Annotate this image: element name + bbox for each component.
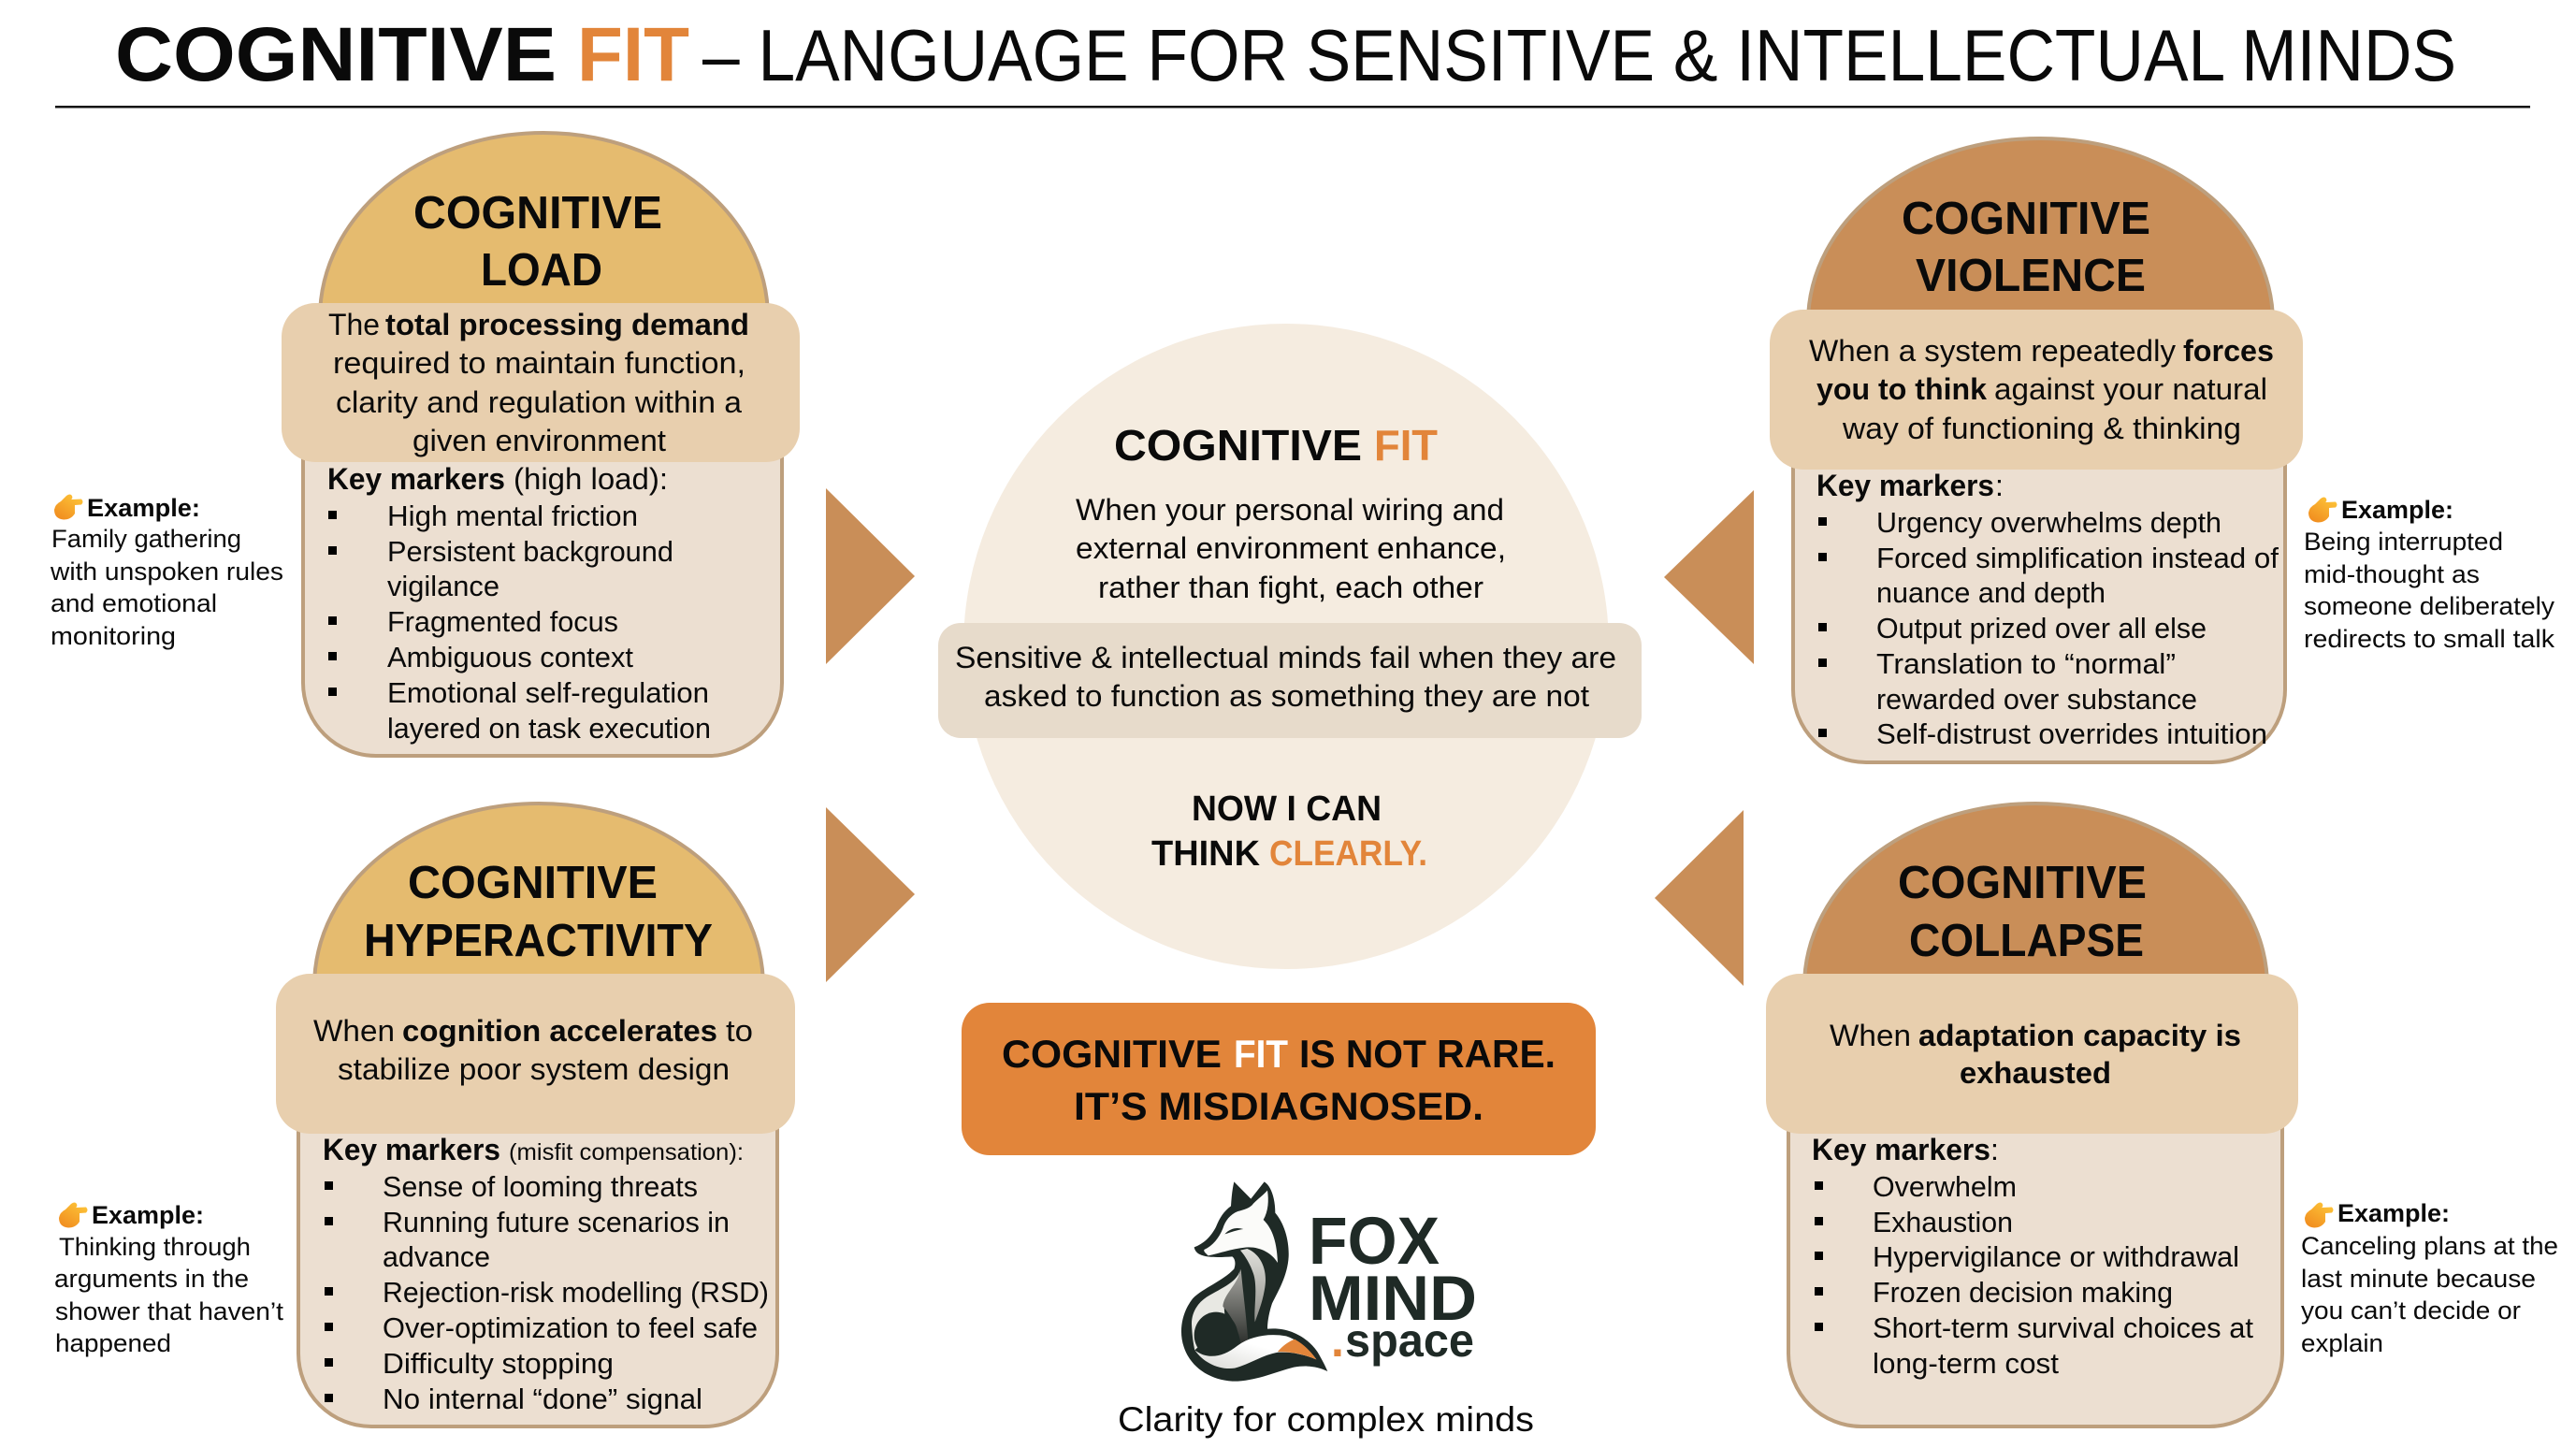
logo wordmark: MIND — [1309, 1263, 1477, 1334]
title: COGNITIVE — [115, 12, 557, 97]
definition band: you to think — [1816, 372, 1987, 406]
heading: COGNITIVE — [413, 188, 662, 239]
definition band: total processing demand — [385, 308, 749, 341]
heading: cognitive fit: FIT — [1374, 421, 1438, 470]
example: canceling plans — [2301, 1199, 2558, 1357]
example: canceling plans: Example: — [2337, 1199, 2450, 1227]
panel: cognitive violence — [1770, 138, 2303, 762]
definition band: exhausted — [1960, 1056, 2111, 1090]
orange callout: not rare: COGNITIVE — [1002, 1032, 1222, 1076]
key markers list: Output prized over all else — [1876, 612, 2207, 644]
panel: cognitive hyperactivity — [276, 804, 795, 1426]
heading: VIOLENCE — [1916, 251, 2146, 301]
key markers list: Urgency overwhelms depth — [1876, 506, 2221, 539]
example: family gathering: with unspoken rules — [50, 557, 283, 586]
key markers list: Running future scenarios in — [383, 1206, 730, 1238]
definition band: adaptation capacity is — [1918, 1019, 2241, 1052]
key markers list: High mental friction — [387, 500, 638, 532]
key markers list: Short-term survival choices at — [1873, 1311, 2253, 1344]
key markers list: Translation to “normal” — [1876, 647, 2176, 680]
logo: fox mind space — [1181, 1181, 1477, 1382]
orange callout: not rare: IS NOT RARE. — [1299, 1032, 1556, 1076]
icon: pointing hand — [2308, 498, 2337, 522]
heading — [1898, 858, 2147, 966]
example: interrupted: Being interrupted — [2304, 528, 2503, 556]
now i can think clearly — [1151, 789, 1427, 874]
heading: HYPERACTIVITY — [364, 916, 713, 966]
logo wordmark: . — [1331, 1314, 1344, 1367]
arrow: violence to fit — [1664, 490, 1754, 664]
example: interrupted: redirects to small talk — [2304, 625, 2555, 653]
dome: cognitive load — [320, 133, 768, 318]
dome: cognitive hyperactivity — [314, 804, 763, 987]
key markers list — [1812, 1133, 2253, 1380]
key markers list: Fragmented focus — [387, 605, 618, 638]
key markers list: rewarded over substance — [1876, 683, 2197, 716]
title: – LANGUAGE FOR SENSITIVE & INTELLECTUAL MINDS — [702, 14, 2456, 96]
heading: LOAD — [481, 245, 602, 296]
arrow: hyperactivity to fit — [826, 807, 915, 982]
definition band: to — [726, 1014, 753, 1048]
key markers list: Exhaustion — [1873, 1206, 2013, 1238]
key markers list: Key markers — [1812, 1133, 1990, 1166]
definition band: required to maintain function, — [333, 346, 745, 380]
markers body — [303, 449, 782, 756]
definition band: The — [328, 308, 380, 341]
definition band: given environment — [412, 424, 666, 457]
definition text — [1076, 493, 1506, 604]
example: shower arguments: happened — [55, 1329, 171, 1357]
key markers list — [323, 1133, 769, 1415]
definition band: clarity and regulation within a — [336, 385, 742, 419]
markers body — [1793, 458, 2285, 762]
heading — [1902, 194, 2150, 301]
definition band: forces — [2183, 334, 2274, 368]
logo wordmark — [1309, 1205, 1477, 1367]
key markers list: Overwhelm — [1873, 1170, 2017, 1203]
key markers list: Sense of looming threats — [383, 1170, 698, 1203]
example: shower arguments — [54, 1201, 284, 1357]
heading: COGNITIVE — [408, 858, 658, 908]
markers body — [1788, 1118, 2282, 1426]
definition band — [1770, 310, 2303, 470]
heading — [364, 858, 713, 966]
definition band: When — [1830, 1019, 1911, 1052]
example: canceling plans: you can’t decide or — [2301, 1296, 2521, 1325]
key markers list: Persistent background — [387, 535, 673, 568]
arrow: collapse to fit — [1655, 810, 1744, 986]
key markers list: (misfit compensation): — [509, 1139, 744, 1166]
key markers list: layered on task execution — [387, 712, 711, 745]
key markers list: Hypervigilance or withdrawal — [1873, 1240, 2239, 1273]
key markers list: (high load): — [514, 462, 668, 496]
definition band — [282, 303, 800, 462]
orange callout: not rare: IT’S MISDIAGNOSED. — [1074, 1084, 1483, 1128]
key markers list: : — [1990, 1133, 1999, 1166]
callout band: asked to function as something they are not — [984, 679, 1589, 713]
example: canceling plans: Canceling plans at the — [2301, 1232, 2558, 1260]
definition band: way of functioning & thinking — [1842, 412, 2241, 445]
key markers list: Emotional self-regulation — [387, 676, 709, 709]
key markers list: Frozen decision making — [1873, 1276, 2173, 1309]
definition text: When your personal wiring and — [1076, 493, 1504, 527]
icon: pointing hand — [59, 1203, 88, 1227]
example: interrupted: Example: — [2341, 496, 2453, 524]
orange callout: not rare: FIT — [1234, 1032, 1288, 1076]
definition band — [276, 974, 795, 1134]
key markers list: nuance and depth — [1876, 576, 2106, 609]
example: shower arguments: arguments in the — [54, 1265, 249, 1293]
key markers list — [1816, 469, 2279, 750]
key markers list: Difficulty stopping — [383, 1347, 614, 1380]
heading — [413, 188, 662, 296]
central circle: cognitive fit — [938, 324, 1642, 969]
example: canceling plans: last minute because — [2301, 1265, 2536, 1293]
logo wordmark: FOX — [1309, 1205, 1440, 1279]
definition text: external environment enhance, — [1076, 531, 1506, 565]
title — [115, 12, 2456, 97]
definition band: When — [313, 1014, 395, 1048]
example: family gathering — [50, 494, 283, 650]
markers body — [298, 1118, 777, 1426]
now i can think clearly: NOW I CAN — [1192, 789, 1382, 829]
callout band — [938, 623, 1642, 738]
icon: pointing hand — [2305, 1203, 2333, 1227]
example: family gathering: and emotional — [51, 589, 217, 617]
key markers list: No internal “done” signal — [383, 1383, 702, 1415]
logo wordmark: space — [1345, 1314, 1474, 1367]
definition band: against your natural — [1994, 372, 2267, 406]
example: family gathering: Example: — [87, 494, 200, 522]
key markers list: vigilance — [387, 570, 499, 602]
heading: COGNITIVE — [1898, 858, 2147, 908]
key markers list: Key markers — [323, 1133, 500, 1166]
key markers list — [327, 462, 711, 745]
key markers list: Key markers — [1816, 469, 1994, 502]
example: interrupted: someone deliberately — [2304, 592, 2555, 620]
example: shower arguments: shower that haven’t — [55, 1297, 284, 1325]
key markers list: : — [1995, 469, 2004, 502]
panel: cognitive load — [282, 133, 800, 756]
key markers list: Rejection-risk modelling (RSD) — [383, 1276, 769, 1309]
key markers list: advance — [383, 1240, 490, 1273]
key markers list: Self-distrust overrides intuition — [1876, 717, 2267, 750]
definition text: rather than fight, each other — [1098, 571, 1483, 604]
key markers list: Over-optimization to feel safe — [383, 1311, 758, 1344]
icon: fox — [1181, 1181, 1327, 1382]
definition band — [1766, 974, 2298, 1134]
callout band: Sensitive & intellectual minds fail when they are — [955, 641, 1616, 674]
arrow: load to fit — [826, 488, 915, 664]
tagline: Clarity for complex minds — [1118, 1400, 1534, 1439]
example: family gathering: Family gathering — [51, 525, 241, 553]
example: family gathering: monitoring — [51, 622, 176, 650]
orange callout: not rare — [962, 1003, 1596, 1155]
key markers list: Ambiguous context — [387, 641, 633, 673]
heading: cognitive fit: COGNITIVE — [1114, 421, 1362, 470]
definition band: When a system repeatedly — [1809, 334, 2176, 368]
heading: COLLAPSE — [1909, 916, 2144, 966]
example: interrupted — [2304, 496, 2555, 653]
example: shower arguments: Example: — [92, 1201, 204, 1229]
example: shower arguments: Thinking through — [59, 1233, 251, 1261]
dome: cognitive violence — [1808, 138, 2273, 323]
now i can think clearly: CLEARLY. — [1269, 834, 1427, 874]
now i can think clearly: THINK — [1151, 834, 1261, 874]
title: FIT — [577, 12, 689, 97]
icon: pointing hand — [54, 494, 82, 520]
heading: COGNITIVE — [1902, 194, 2150, 244]
example: canceling plans: explain — [2301, 1329, 2383, 1357]
dome: cognitive collapse — [1804, 804, 2267, 987]
key markers list: long-term cost — [1873, 1347, 2059, 1380]
example: interrupted: mid-thought as — [2304, 560, 2480, 588]
definition band: cognition accelerates — [402, 1014, 717, 1048]
key markers list: Forced simplification instead of — [1876, 542, 2279, 574]
key markers list: Key markers — [327, 462, 505, 496]
panel: cognitive collapse — [1766, 804, 2298, 1426]
definition band: stabilize poor system design — [338, 1052, 730, 1086]
